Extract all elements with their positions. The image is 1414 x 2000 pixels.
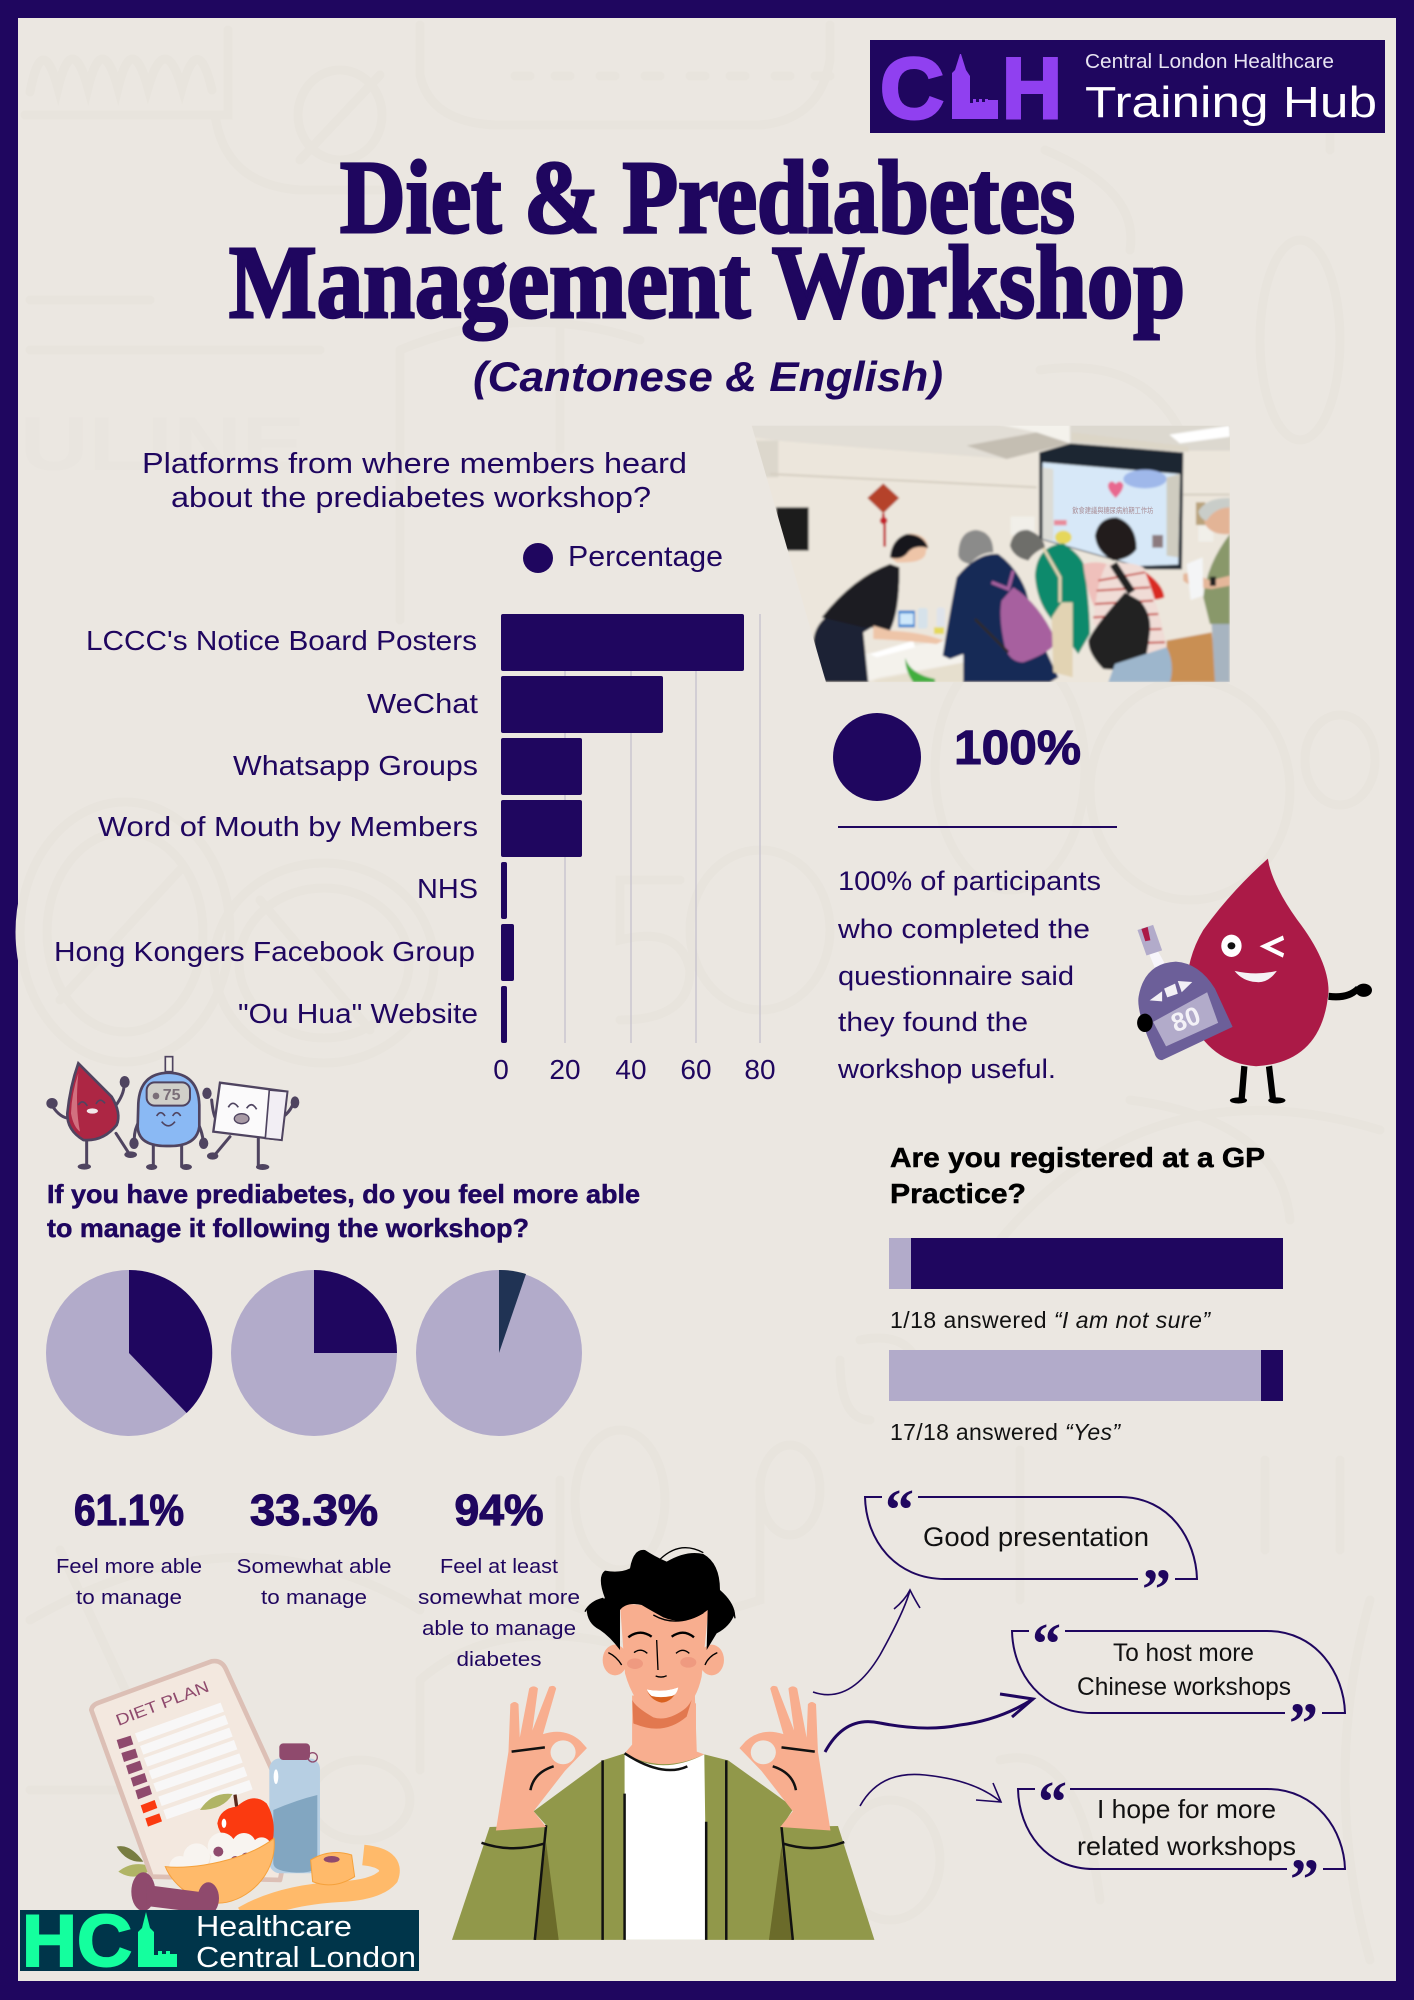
100% stat: [833, 713, 1117, 828]
bar chart: platforms: [54, 614, 776, 1085]
100% description text: questionnaire said: [838, 961, 1074, 991]
title: Diet & Prediabetes: [340, 140, 1075, 255]
arrow: to I hope for more related workshops: [860, 1774, 1001, 1806]
subtitle: (Cantonese & English): [473, 353, 943, 400]
stat: 94%: Feel at least: [440, 1556, 558, 1578]
stat: 61.1%: 61.1%: [74, 1486, 184, 1535]
logo: HCL Healthcare Central London: HC: [22, 1901, 132, 1982]
title: [229, 140, 1185, 340]
axis labels: 0: [493, 1054, 509, 1085]
pie chart: 61.1%: [46, 1270, 212, 1436]
axis labels: [493, 1054, 776, 1085]
title: Management Workshop: [229, 225, 1185, 340]
illustration: diet plan: DIET PLAN: [114, 1679, 212, 1730]
100% description text: who completed the: [837, 914, 1090, 944]
quote bubble: To host more Chinese workshops: Chinese workshops: [1077, 1673, 1291, 1701]
chart question heading: Platforms from where members heard: [142, 448, 687, 480]
stacked bar: Yes: 17/18 answered “Yes”: [890, 1419, 1121, 1445]
quote bubble: To host more Chinese workshops: [1012, 1611, 1345, 1756]
arrow: to To host more Chinese workshops: [825, 1694, 1033, 1752]
quote bubble: I hope for more related workshops: “: [1038, 1769, 1067, 1834]
icon: blood drop mascot with glucose meter: 80: [1167, 1000, 1204, 1038]
quote bubble: Good presentation: Good presentation: [923, 1522, 1149, 1552]
stat: 94%: 94%: [454, 1486, 544, 1535]
workshop photo: 飲食建議與糖尿病前期工作坊: [1072, 505, 1154, 516]
stacked bar: I am not sure: 1/18 answered “I am not sure”: [890, 1307, 1211, 1333]
bar labels: "Ou Hua" Website: [238, 998, 478, 1029]
bar: WeChat: [501, 676, 663, 733]
stat: 94%: somewhat more: [418, 1587, 580, 1609]
100% description text: workshop useful.: [837, 1054, 1056, 1084]
axis labels: 40: [615, 1054, 647, 1085]
illustration: diet plan: [91, 1661, 389, 1917]
heading: prediabetes question: [47, 1179, 640, 1243]
bar labels: Word of Mouth by Members: [98, 811, 478, 842]
stat: 33.3%: 33.3%: [250, 1486, 378, 1535]
stacked bar: I am not sure: [889, 1238, 1283, 1333]
stat: 94%: able to manage: [422, 1618, 576, 1640]
quote bubble: To host more Chinese workshops: To host more: [1113, 1639, 1254, 1667]
chart question heading: about the prediabetes workshop?: [171, 482, 651, 514]
logo: HCL Healthcare Central London: [20, 1901, 419, 1982]
axis labels: 80: [744, 1054, 776, 1085]
100% description text: they found the: [838, 1007, 1028, 1037]
logo: CLH Training Hub: H: [1002, 41, 1062, 137]
100% description text: [837, 866, 1101, 1084]
background doodles: ULINE: [20, 402, 305, 487]
logo: CLH Training Hub: C: [880, 41, 944, 137]
bar labels: [54, 625, 478, 1029]
stat: 33.3%: to manage: [261, 1587, 367, 1609]
quote bubble: To host more Chinese workshops: “: [1032, 1611, 1061, 1676]
quote bubble: Good presentation: “: [885, 1477, 914, 1542]
illustration: man making OK gesture: [452, 1548, 874, 1940]
logo: CLH Training Hub: Training Hub: [1085, 78, 1377, 127]
stat: 33.3%: Somewhat able: [236, 1556, 392, 1578]
axis labels: 60: [680, 1054, 712, 1085]
bar labels: WeChat: [367, 688, 478, 719]
quote bubble: I hope for more related workshops: [1018, 1769, 1345, 1912]
bar: Word of Mouth by Members: [501, 800, 582, 857]
pie chart: 33.3%: [231, 1270, 397, 1436]
stat: 94%: [418, 1486, 580, 1671]
chart legend: Percentage: [568, 541, 723, 573]
quote bubble: Good presentation: [865, 1477, 1197, 1622]
bar labels: NHS: [417, 873, 478, 904]
bar: Whatsapp Groups: [501, 738, 582, 795]
quote bubble: I hope for more related workshops: ”: [1290, 1847, 1319, 1912]
heading: GP registration: Practice?: [890, 1178, 1026, 1209]
icon: three happy characters: [46, 1057, 299, 1170]
axis labels: 20: [549, 1054, 581, 1085]
stat: 33.3%: [236, 1486, 392, 1609]
stat: 61.1%: [56, 1486, 202, 1609]
stat: 61.1%: Feel more able: [56, 1556, 202, 1578]
quote bubble: I hope for more related workshops: I hope for more: [1097, 1794, 1276, 1824]
bar: Ou Hua Website: [501, 986, 507, 1043]
logo: CLH Training Hub: [870, 40, 1385, 137]
bar labels: Whatsapp Groups: [233, 750, 478, 781]
heading: prediabetes question: If you have prediabetes, do you feel more able: [47, 1179, 640, 1209]
logo: CLH Training Hub: Central London Healthcare: [1085, 51, 1334, 73]
logo: HCL Healthcare Central London: Central London: [196, 1942, 416, 1974]
stacked bar: Yes: [889, 1350, 1283, 1445]
icon: three happy characters: 75: [163, 1087, 181, 1104]
100% stat: 100%: [954, 722, 1081, 775]
quote bubble: I hope for more related workshops: related workshops: [1077, 1831, 1296, 1861]
chart question heading: [142, 448, 687, 514]
100% description text: 100% of participants: [838, 866, 1101, 896]
quote bubble: Good presentation: ”: [1142, 1557, 1171, 1622]
heading: GP registration: Are you registered at a GP: [890, 1142, 1265, 1173]
workshop photo: [750, 424, 1232, 684]
heading: GP registration: [890, 1142, 1265, 1209]
pie chart: 94%: [416, 1270, 582, 1436]
logo: HCL Healthcare Central London: Healthcare: [196, 1911, 352, 1943]
bar: Hong Kongers Facebook Group: [501, 924, 514, 981]
icon: blood drop mascot with glucose meter: [1137, 859, 1372, 1103]
quote bubble: To host more Chinese workshops: ”: [1289, 1691, 1318, 1756]
stat: 61.1%: to manage: [76, 1587, 182, 1609]
bar labels: LCCC's Notice Board Posters: [86, 625, 477, 656]
bar: LCCC's Notice Board Posters: [501, 614, 744, 671]
bar labels: Hong Kongers Facebook Group: [54, 936, 475, 967]
heading: prediabetes question: to manage it following the workshop?: [47, 1213, 529, 1243]
stat: 94%: diabetes: [456, 1649, 542, 1671]
arrow: to Good presentation: [813, 1590, 920, 1695]
bar: NHS: [501, 862, 507, 919]
